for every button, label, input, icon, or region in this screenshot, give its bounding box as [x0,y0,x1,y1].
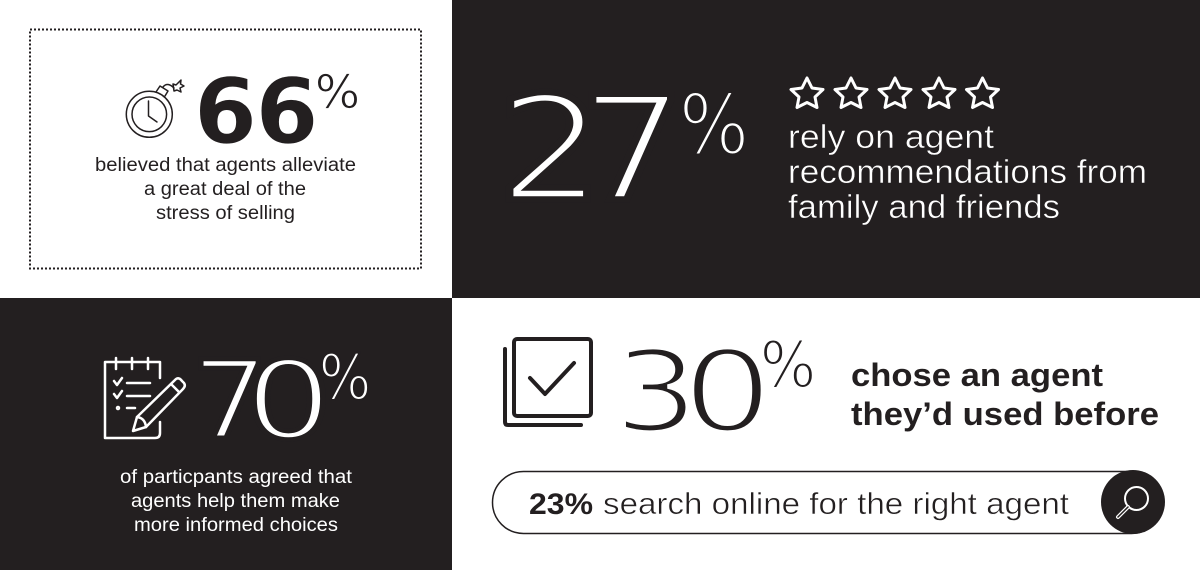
stat: 70% [191,339,371,464]
stat: 66%: 6 [256,60,318,164]
text: 23% bold: 23% [529,488,593,521]
stat: 27%: 2 [498,66,604,234]
text: chose an agent [851,357,1159,432]
stat: 66% [194,60,360,164]
stat: 30% [613,326,816,458]
icon: magnifier button [1101,470,1165,534]
text: search online: search online for the right agent [603,486,1069,521]
text: rely on agent recommendations: recommendations from [788,153,1147,190]
stat: 30%: 3 [613,326,699,458]
dotted frame [30,30,421,268]
text: rely on agent recommendations: family and friends [788,188,1060,225]
text: of participants agreed: agents help them make [131,491,340,512]
icon: stopwatch bomb [126,80,184,137]
panel: 27 percent recommendations [452,0,1200,298]
stat: 66%: % [315,65,360,119]
icon: stacked checkbox [505,339,591,425]
icon: five stars [791,78,998,108]
text: of participants agreed: of particpants agreed that [120,467,353,488]
text: of participants agreed [120,467,353,536]
stat: 27% [498,66,749,234]
stat: 27%: % [679,76,749,174]
stat: 66%: 6 [194,60,257,164]
icon: notepad and pencil [105,358,185,438]
text: chose an agent: chose an agent [851,357,1103,393]
stat: 70%: 7 [191,339,269,464]
panel: 66 percent stress [0,0,452,298]
stat: 27%: 7 [579,66,685,234]
stat: 70%: 0 [245,339,332,464]
stat: 30%: 0 [682,326,773,458]
stat: 70%: % [319,341,371,414]
text: believed that agents: believed that agents alleviate [95,155,356,176]
text: rely on agent recommendations: rely on agent [788,118,994,155]
text: rely on agent recommendations [788,118,1147,225]
search bar [492,470,1165,534]
panel: 30 percent and search [492,326,1165,534]
text: believed that agents: stress of selling [156,203,295,224]
panel: 70 percent informed [0,298,452,570]
text: believed that agents [95,155,356,224]
stat: 30%: % [760,329,816,403]
text: chose an agent: they’d used before [851,396,1159,432]
text: of participants agreed: more informed choices [134,515,338,536]
text: believed that agents: a great deal of the [144,179,306,200]
